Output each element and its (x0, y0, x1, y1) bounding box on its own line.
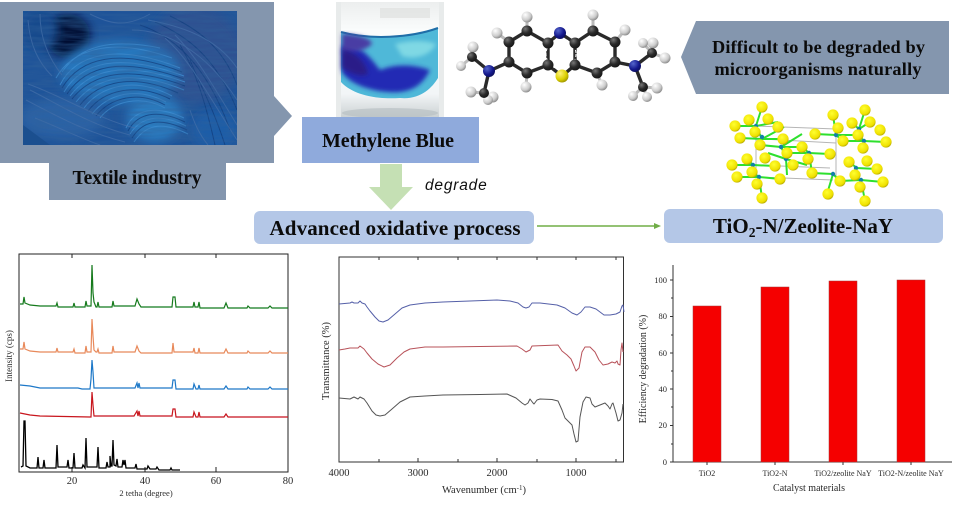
box: catalyst name: -N/Zeolite-NaY (755, 214, 893, 238)
FTIR plot frame (339, 257, 624, 462)
chart: degradation efficiency bars (638, 265, 952, 494)
label: textile industry: Textile industry (72, 168, 202, 189)
XRD axis numbers: 60 (211, 476, 221, 487)
FTIR y axis title: Transmittance (%) (321, 321, 332, 400)
label: degrade: degrade (425, 177, 487, 194)
bar chart y tick labels: 60 (658, 348, 667, 358)
XRD y axis title: Intensity (cps) (4, 330, 14, 382)
bar chart y tick labels: 20 (658, 420, 667, 430)
bar chart category labels (699, 469, 944, 478)
bar chart y tick labels (654, 275, 667, 467)
XRD plot frame (19, 254, 288, 472)
bar: TiO2/zeolite NaY (829, 281, 857, 462)
XRD axis numbers: 20 (67, 476, 77, 487)
XRD curve: green (20, 265, 288, 308)
FTIR curve: red (339, 343, 623, 371)
FTIR curve: gray (339, 394, 623, 442)
FTIR x axis title: -1 (517, 484, 523, 492)
callout: difficult to degrade (681, 21, 949, 94)
chart: XRD patterns (4, 254, 293, 498)
bar: TiO2 (693, 306, 721, 462)
label: methylene blue (302, 117, 479, 163)
bar chart y axis title: Efficiency degradation (%) (638, 315, 649, 423)
bar chart category labels: TiO2-N (762, 469, 788, 478)
XRD curve: black (21, 421, 180, 470)
bar chart x axis title: Catalyst materials (773, 483, 845, 494)
photo: beaker of methylene blue (336, 2, 444, 118)
FTIR axis numbers: 4000 (328, 468, 350, 479)
box: catalyst name (664, 209, 943, 243)
FTIR curve: blue (339, 300, 624, 322)
arrow: methylene blue to oxidative process (369, 164, 413, 210)
box: advanced oxidative process (254, 211, 534, 244)
XRD axis numbers: 40 (140, 476, 150, 487)
arrow: process to catalyst (537, 223, 661, 229)
arrow panel background (0, 2, 292, 163)
bar: TiO2-N (761, 287, 789, 462)
box: advanced oxidative process: Advanced oxidative process (270, 216, 520, 240)
FTIR axis numbers: 1000 (566, 468, 586, 479)
FTIR x axis title: Wavenumber (cm (442, 485, 517, 496)
box: catalyst name: 2 (749, 225, 756, 240)
photo: blue yarn (23, 11, 237, 145)
callout: difficult to degrade: Difficult to be degraded by (712, 37, 925, 57)
bar chart y tick labels: 40 (658, 384, 667, 394)
bar chart category labels: TiO2/zeolite NaY (814, 469, 872, 478)
XRD curve: red (20, 392, 288, 417)
FTIR axis numbers: 3000 (408, 468, 428, 479)
callout: difficult to degrade: microorganisms naturally (714, 59, 922, 79)
bar chart category labels: TiO2 (699, 469, 715, 478)
bar: TiO2-N/zeolite NaY (897, 280, 925, 462)
XRD axis numbers: 80 (283, 476, 293, 487)
FTIR x axis title: ) (523, 485, 527, 496)
panel: textile industry (0, 2, 292, 200)
bar chart y tick labels: 0 (663, 457, 667, 467)
label: textile industry (49, 163, 226, 200)
XRD axis numbers (67, 476, 293, 487)
bar chart y tick labels: 100 (654, 275, 667, 285)
XRD curve: blue (20, 360, 288, 389)
XRD x axis title: 2 tetha (degree) (119, 488, 173, 498)
FTIR axis numbers (328, 468, 586, 479)
bar chart axes (670, 265, 952, 465)
chart: FTIR spectra (321, 257, 624, 496)
bar chart category labels: TiO2-N/zeolite NaY (878, 469, 944, 478)
XRD curve: orange (20, 319, 288, 353)
structure: zeolite crystal (726, 101, 892, 207)
bar chart y tick labels: 80 (658, 311, 667, 321)
box: catalyst name: TiO (713, 214, 749, 238)
FTIR axis numbers: 2000 (486, 468, 508, 479)
label: methylene blue: Methylene Blue (322, 130, 454, 152)
molecule: methylene blue ball and stick (456, 10, 670, 105)
